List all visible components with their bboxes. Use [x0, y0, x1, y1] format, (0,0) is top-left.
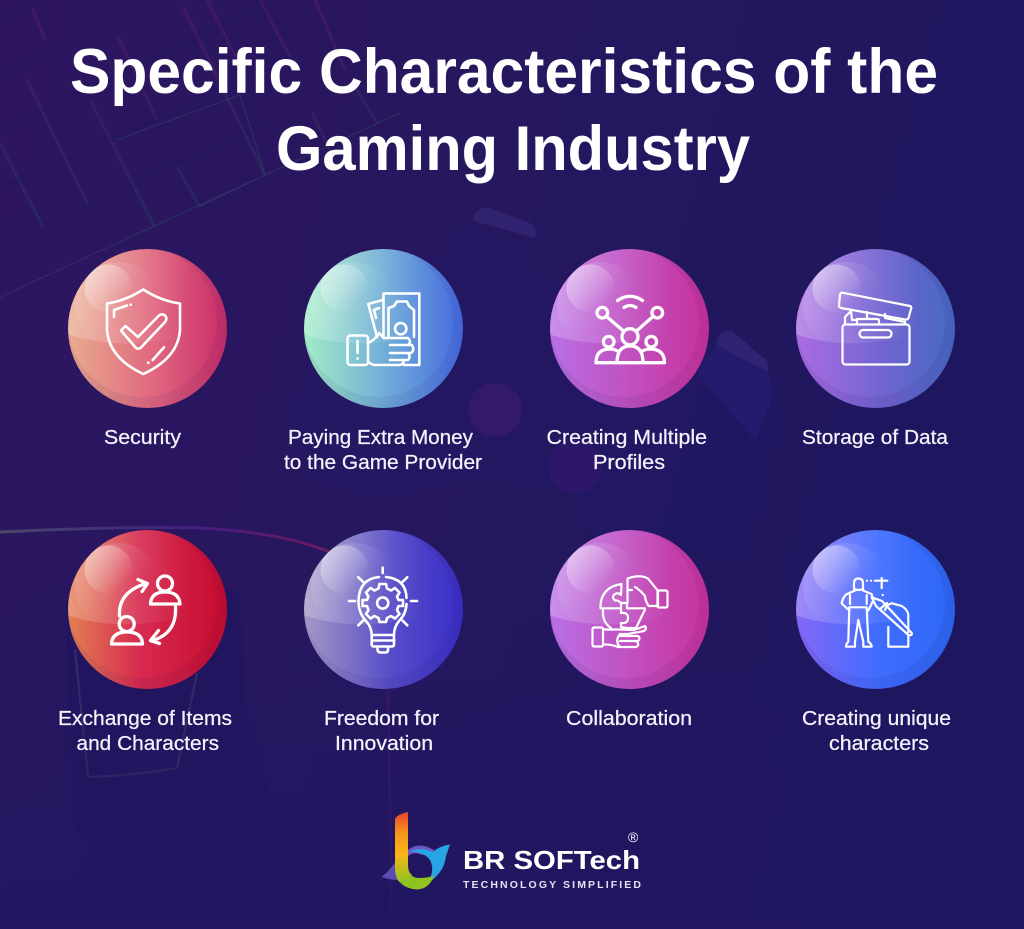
sphere: money	[302, 246, 466, 410]
sphere: storage	[794, 246, 958, 410]
panel: creating multiple profiles	[546, 246, 712, 474]
label: exchange of items and characters: Exchange of Items	[58, 708, 232, 730]
registered mark: ®	[628, 829, 639, 845]
background image: keyboard	[0, 0, 400, 297]
background image: game controller	[280, 207, 777, 563]
icon: hands assembling puzzle globe	[592, 576, 668, 647]
icon: character designer with pen	[842, 578, 912, 647]
icon: connected people	[596, 296, 664, 363]
icon: hand holding money	[348, 294, 419, 365]
label: exchange of items and characters	[58, 708, 232, 755]
title: Gaming Industry	[276, 114, 750, 184]
title	[70, 37, 938, 184]
label: freedom for innovation	[324, 708, 439, 755]
sphere: exchange	[66, 528, 230, 692]
panel: security	[66, 246, 230, 449]
label: paying extra money: to the Game Provider	[284, 452, 482, 474]
title: Specific Characteristics of the	[70, 37, 938, 107]
sphere: profiles	[548, 246, 712, 410]
panel: storage of data	[794, 246, 958, 449]
label: creating multiple profiles	[546, 427, 707, 474]
logo wordmark: BR SOFTech	[463, 845, 640, 875]
logo tagline: TECHNOLOGY SIMPLIFIED	[463, 879, 641, 891]
icon: exchange between people	[112, 576, 180, 644]
label: freedom for innovation: Innovation	[335, 733, 433, 755]
label: creating multiple profiles: Creating Multiple	[546, 427, 707, 449]
label: collaboration: Collaboration	[566, 708, 692, 730]
background image: mouse	[0, 528, 392, 929]
label: paying extra money: Paying Extra Money	[288, 427, 473, 449]
sphere: collaboration	[548, 528, 712, 692]
logo: BR Softech	[382, 812, 641, 891]
sphere: innovation	[302, 528, 466, 692]
icon: shield with check	[107, 290, 180, 374]
panel: exchange of items and characters	[58, 528, 232, 755]
sphere: characters	[794, 528, 958, 692]
panel: freedom for innovation	[302, 528, 466, 755]
label: paying extra money	[284, 427, 482, 474]
panel: paying extra money	[284, 246, 482, 474]
label: storage of data: Storage of Data	[802, 427, 949, 449]
label: exchange of items and characters: and Characters	[76, 733, 219, 755]
label: creating unique characters	[802, 708, 951, 755]
label: creating multiple profiles: Profiles	[593, 452, 665, 474]
sphere: security	[66, 246, 230, 410]
label: creating unique characters: Creating unique	[802, 708, 951, 730]
icon: light bulb with gear	[349, 568, 417, 652]
label: security: Security	[104, 427, 181, 449]
logo mark	[382, 812, 450, 890]
panel: creating unique characters	[794, 528, 958, 755]
icon: storage box	[839, 293, 911, 364]
label: freedom for innovation: Freedom for	[324, 708, 439, 730]
label: creating unique characters: characters	[829, 733, 929, 755]
panel: collaboration	[548, 528, 712, 730]
